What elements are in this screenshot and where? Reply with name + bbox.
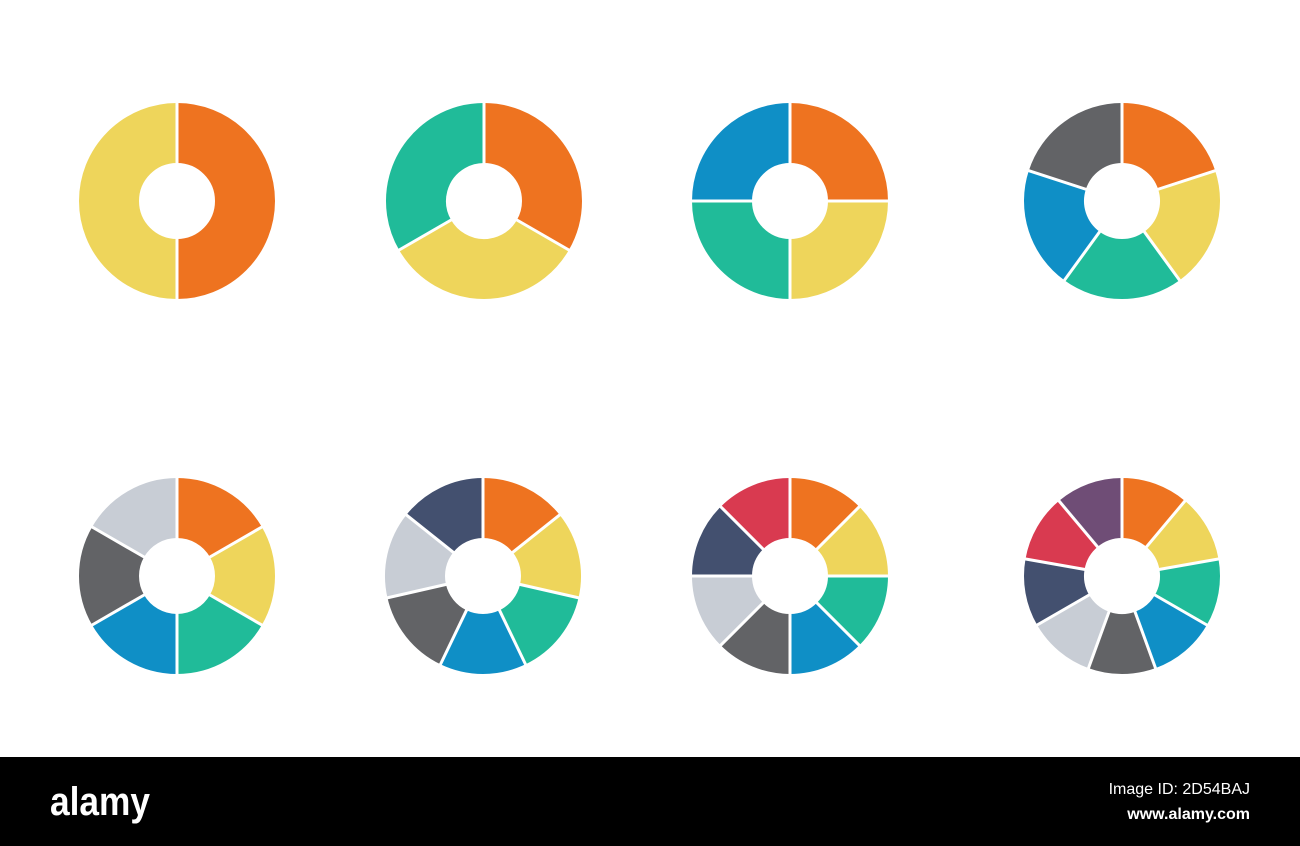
donut chart: 6 segments	[84, 476, 270, 676]
donut chart: 8 segments	[690, 476, 890, 676]
donut chart: 4 segments	[690, 101, 890, 301]
footer text: website: www.alamy.com	[1126, 806, 1250, 823]
donut chart: 5 segments	[1027, 101, 1217, 296]
donut chart: 7 segments	[386, 476, 580, 672]
footer logo: alamy: alamy	[50, 780, 151, 824]
footer text: image id: Image ID: 2D54BAJ	[1109, 781, 1250, 798]
donut chart: 9 segments	[1024, 476, 1220, 672]
donut chart: 3 segments	[391, 101, 577, 294]
footer bar	[0, 757, 1300, 846]
donut chart: 2 segments	[109, 101, 245, 301]
